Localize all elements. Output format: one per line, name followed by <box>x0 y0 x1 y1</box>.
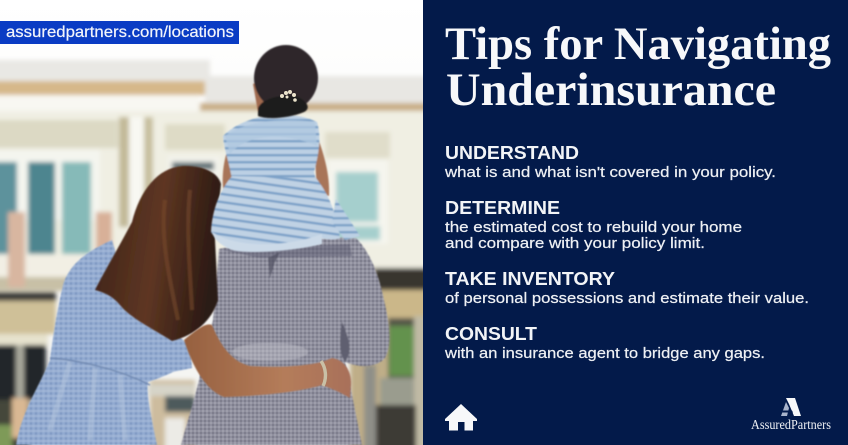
woman's long dark hair <box>95 166 221 341</box>
watch bracelet <box>321 361 325 386</box>
website url tag <box>0 21 239 44</box>
woman in blue dress <box>16 240 192 445</box>
girl's head and hair <box>253 45 318 118</box>
woman's arm around man <box>184 324 351 398</box>
tip: take inventory: TAKE INVENTORY <box>445 268 616 289</box>
logo mark <box>781 398 801 416</box>
website url tag: assuredpartners.com/locations <box>6 24 234 41</box>
tip: determine <box>445 197 742 252</box>
tip: determine: DETERMINE <box>445 197 560 218</box>
house background <box>0 0 434 445</box>
tip: determine: the estimated cost to rebuild your home <box>445 219 742 236</box>
icon: house <box>445 404 477 430</box>
tip: take inventory: of personal possessions and estimate their value. <box>445 290 809 307</box>
tip: consult: with an insurance agent to bridge any gaps. <box>444 345 765 362</box>
tip: take inventory <box>445 268 809 307</box>
tip: understand: UNDERSTAND <box>445 142 579 163</box>
title <box>445 18 831 116</box>
navy text panel <box>423 0 848 445</box>
hair tie <box>280 90 297 102</box>
man in checked shirt <box>181 238 389 445</box>
title: Underinsurance <box>446 64 776 116</box>
tip: consult <box>444 323 765 362</box>
girl on shoulders <box>211 115 360 252</box>
tip: consult: CONSULT <box>445 323 538 344</box>
photo: family looking at a house <box>0 0 434 445</box>
title: Tips for Navigating <box>445 18 831 70</box>
tip: understand <box>444 142 776 181</box>
tip: understand: what is and what isn't covered in your policy. <box>444 164 776 181</box>
tip: determine: and compare with your policy limit. <box>445 235 705 252</box>
AssuredPartners logo: AssuredPartners <box>751 418 831 433</box>
AssuredPartners logo <box>751 398 831 433</box>
